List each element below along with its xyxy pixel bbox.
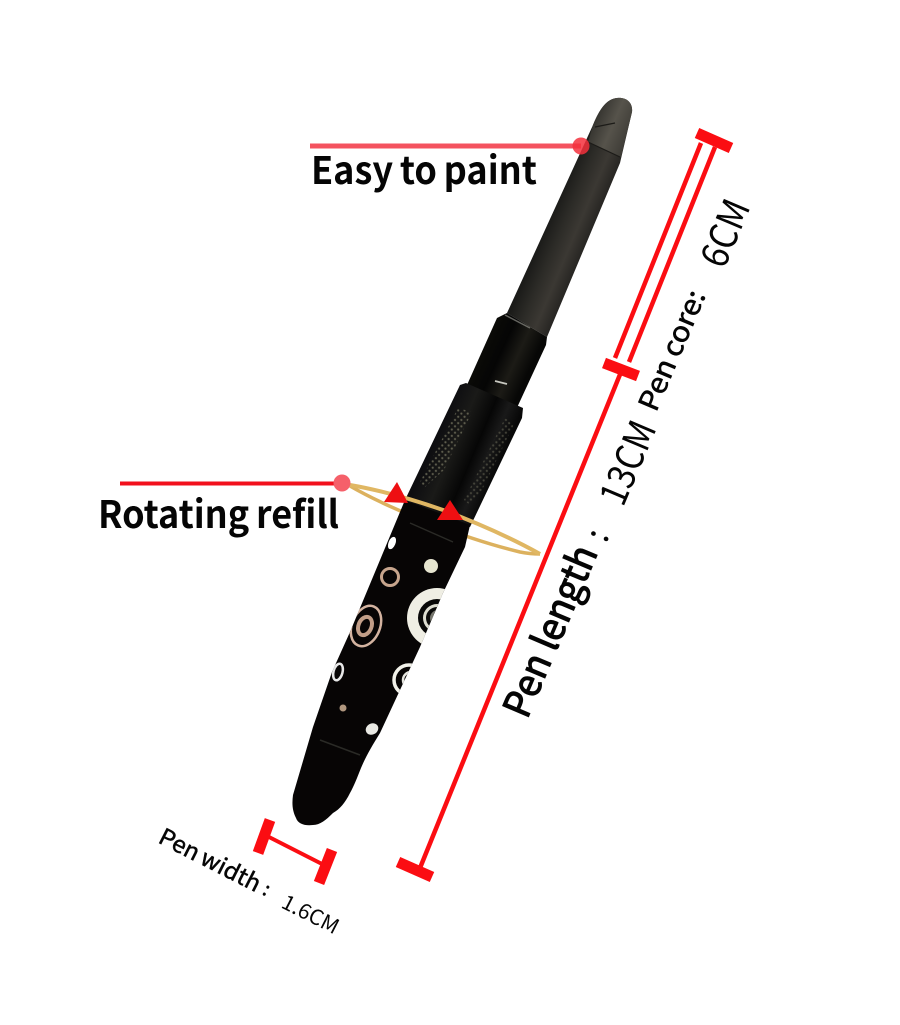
ring front arc (350, 485, 540, 554)
pen nib (507, 98, 632, 337)
rotation arrows (384, 482, 463, 520)
infographic: pen dimensions (101, 98, 750, 934)
dimension: pen core (604, 133, 731, 376)
ring back arc (350, 486, 540, 554)
label: pen width: Pen width (154, 818, 268, 899)
callout: easy to paint: Easy to paint (311, 140, 537, 195)
label: colon: : (258, 874, 277, 902)
knurled grip (405, 383, 523, 527)
label: 1.6CM: 1.6CM (277, 887, 345, 941)
pen barrel (292, 500, 470, 825)
pen illustration (292, 98, 632, 825)
label: 13CM: 13CM (582, 411, 667, 512)
label: 6CM: 6CM (683, 189, 761, 274)
label: pen length: : (570, 520, 619, 548)
dimension: pen length (398, 372, 621, 877)
pen collar (467, 313, 547, 412)
dimension: pen width (258, 820, 332, 883)
nib tip highlight (588, 98, 632, 157)
callout: rotating refill: Rotating refill (98, 484, 339, 539)
barrel patterns (320, 523, 467, 755)
label: pen length: Pen length (486, 535, 608, 724)
label: pen core: Pen core: (627, 283, 714, 417)
